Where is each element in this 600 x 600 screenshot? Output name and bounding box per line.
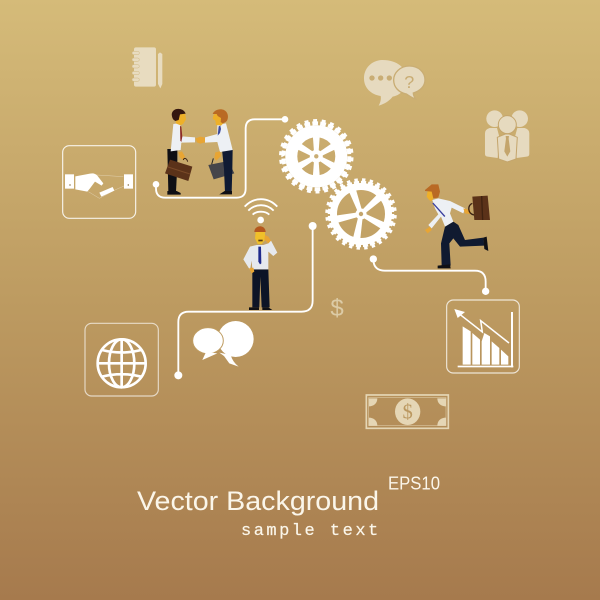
icon: notebook and pencil xyxy=(132,47,162,88)
person: businessman on phone xyxy=(243,226,277,310)
person: businessman left with brown briefcase xyxy=(165,109,195,195)
label: EPS10: EPS10 xyxy=(388,474,440,494)
connector line: handshake to gear xyxy=(153,116,288,198)
panel: globe box with icon xyxy=(85,323,158,396)
icon: speech bubbles with question: ? xyxy=(404,72,414,92)
gear: upper xyxy=(281,121,352,192)
icon: group of people xyxy=(485,110,529,162)
heading: Vector Background: Vector Background xyxy=(137,486,379,516)
connector line: gear to chart xyxy=(370,255,489,295)
icon: white speech bubbles xyxy=(193,321,254,367)
subheading: sample text: sample text xyxy=(241,522,381,541)
icon: handshake xyxy=(65,173,133,198)
icon: dollar banknote: $ xyxy=(402,402,413,424)
person: running businessman with briefcase xyxy=(425,184,490,268)
icon: falling bar chart with arrow xyxy=(454,309,513,367)
icon: dollar sign: $ xyxy=(330,295,344,322)
person: businessman right with grey briefcase xyxy=(205,109,234,194)
gear: lower xyxy=(327,180,395,248)
connector line: phone man to globe xyxy=(174,222,317,379)
icon: speech bubbles with question xyxy=(364,60,425,106)
panel: chart box with icon xyxy=(447,300,519,373)
icon: globe xyxy=(98,339,146,387)
icon: wifi signal xyxy=(245,199,277,223)
icon: dollar banknote xyxy=(366,395,448,428)
panel: handshake box with icon xyxy=(63,146,136,218)
hands clasped xyxy=(196,137,205,144)
